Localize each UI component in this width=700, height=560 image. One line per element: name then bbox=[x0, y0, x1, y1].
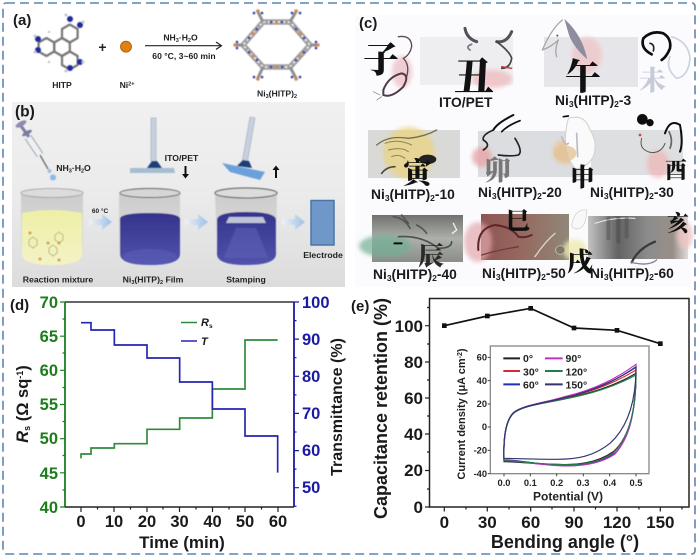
y axis tick labels: 80 bbox=[404, 353, 423, 372]
panel e: capacitance retention chart bbox=[351, 298, 689, 552]
reaction condition: reagent: O bbox=[191, 32, 198, 42]
Ni label: 2+ bbox=[128, 82, 134, 88]
reaction condition: reagent: 2 bbox=[188, 38, 191, 44]
zodiac calligraphy characters: 辰 bbox=[418, 236, 444, 273]
panel d: sheet resistance and transmittance chart bbox=[10, 294, 346, 552]
beaker: stamping bbox=[215, 188, 277, 265]
framework label: (HITP) bbox=[269, 88, 294, 98]
zodiac calligraphy characters: 酉 bbox=[665, 154, 687, 185]
sample labels: (HITP) bbox=[609, 266, 649, 281]
inset y tick labels bbox=[474, 352, 487, 479]
sample labels: 2 bbox=[614, 99, 619, 109]
inset x tick labels: 0.4 bbox=[603, 478, 617, 488]
sample labels: (HITP) bbox=[609, 185, 649, 200]
panel c background bbox=[355, 15, 691, 287]
framework label: 2 bbox=[294, 94, 297, 100]
sample labels: 2 bbox=[430, 193, 435, 203]
flow arrows bbox=[89, 214, 305, 230]
data line: Rs bbox=[81, 340, 278, 458]
inset y tick labels: -20 bbox=[474, 446, 487, 456]
zodiac calligraphy characters: 巳 bbox=[506, 201, 530, 236]
inset x tick labels: 0.2 bbox=[550, 478, 563, 488]
step label: film: Ni bbox=[123, 274, 131, 284]
sample labels: 2 bbox=[541, 272, 546, 282]
inset frame and curves bbox=[488, 346, 649, 476]
sample labels: -20 bbox=[542, 185, 562, 200]
beaker: Ni3(HITP)2 film bbox=[119, 188, 180, 265]
arrow: down bbox=[182, 166, 189, 178]
y axis tick labels: 100 bbox=[395, 317, 423, 336]
inset legend labels: 90° bbox=[566, 353, 581, 365]
sample labels: 3 bbox=[569, 99, 574, 109]
zodiac calligraphy characters: 卯 bbox=[484, 149, 511, 188]
zodiac art: bottom row bbox=[393, 210, 657, 264]
sample labels: -30 bbox=[654, 185, 674, 200]
panel b: fabrication process bbox=[12, 102, 345, 287]
icon: electrode bbox=[311, 200, 334, 245]
inset y axis title: -2 bbox=[457, 352, 464, 358]
sample labels: 3 bbox=[604, 191, 609, 201]
left axis title: ) bbox=[14, 365, 32, 371]
electrode label: Electrode bbox=[303, 250, 343, 260]
legend: s bbox=[209, 323, 213, 330]
reaction condition: reagent: NH bbox=[163, 32, 176, 42]
zodiac calligraphy characters: 未 bbox=[639, 59, 666, 98]
panel label (d): (d) bbox=[10, 297, 29, 314]
HITP label: HITP bbox=[52, 80, 72, 90]
sample labels: 3 bbox=[492, 191, 497, 201]
data line: T bbox=[81, 323, 278, 473]
sample labels: -10 bbox=[435, 187, 455, 202]
NH3H2O label: NH bbox=[56, 163, 69, 173]
x axis tick labels: 120 bbox=[603, 513, 631, 532]
sample labels: Ni bbox=[590, 266, 604, 281]
icon: Ni ion bbox=[120, 41, 132, 52]
legend: T bbox=[201, 336, 209, 348]
x axis tick labels: 30 bbox=[170, 513, 189, 531]
panel c: transparent film samples with zodiac artwork bbox=[355, 15, 693, 287]
x axis tick labels: 60 bbox=[521, 513, 540, 532]
sample labels: Ni bbox=[482, 266, 496, 281]
sample labels: -3 bbox=[619, 93, 632, 108]
NH3H2O label: 2 bbox=[81, 168, 84, 174]
x axis tick labels: 40 bbox=[203, 513, 222, 531]
zodiac calligraphy characters: 午 bbox=[565, 49, 601, 100]
y axis tick labels: 60 bbox=[404, 389, 423, 408]
inset y tick labels: -40 bbox=[474, 469, 487, 479]
sample labels: (HITP) bbox=[497, 185, 537, 200]
inset y tick labels: 20 bbox=[477, 399, 487, 409]
inset y tick labels: 40 bbox=[477, 376, 487, 386]
x axis tick labels: 30 bbox=[478, 513, 497, 532]
sample labels: 2 bbox=[537, 191, 542, 201]
x axis tick labels: 0 bbox=[440, 513, 449, 532]
icon: HITP molecule bbox=[34, 14, 84, 72]
inset legend labels: 150° bbox=[566, 380, 587, 392]
sample labels: (HITP) bbox=[392, 267, 432, 282]
sample labels: 3 bbox=[387, 273, 392, 283]
left axis tick labels: 65 bbox=[40, 328, 58, 346]
right axis tick labels: 100 bbox=[302, 294, 330, 312]
sample labels: 3 bbox=[496, 272, 501, 282]
framework label: Ni bbox=[257, 88, 266, 98]
x axis tick labels: 20 bbox=[138, 513, 156, 531]
y axis tick labels: 40 bbox=[404, 425, 423, 444]
step label: reaction mixture: Reaction mixture bbox=[23, 274, 93, 284]
inset legend labels: 30° bbox=[523, 366, 539, 378]
Ni label: Ni bbox=[120, 80, 128, 90]
sample labels bbox=[371, 93, 674, 283]
right axis tick labels: 60 bbox=[302, 442, 320, 460]
sample labels: Ni bbox=[371, 187, 385, 202]
plot frame bbox=[430, 298, 689, 507]
x axis title: Bending angle (°) bbox=[491, 532, 639, 552]
arrow: reaction bbox=[145, 42, 222, 49]
icon: syringe bbox=[15, 119, 56, 180]
inset y tick labels: 60 bbox=[477, 352, 487, 362]
zodiac calligraphy characters: 戌 bbox=[567, 242, 593, 279]
zodiac calligraphy characters bbox=[363, 32, 690, 279]
sample labels: ITO/PET bbox=[439, 95, 493, 110]
inset x tick labels: 0.1 bbox=[524, 478, 537, 488]
left axis tick labels: 45 bbox=[40, 465, 58, 483]
y axis tick labels bbox=[395, 317, 423, 517]
beaker: reaction mixture bbox=[21, 188, 83, 265]
sample labels: Ni bbox=[555, 93, 569, 108]
zodiac calligraphy characters: 亥 bbox=[667, 207, 690, 238]
plus sign: + bbox=[98, 39, 107, 55]
film samples bbox=[368, 37, 688, 262]
right axis tick labels bbox=[302, 294, 330, 497]
inset y axis title: Current density (μA cm bbox=[456, 358, 468, 480]
right axis tick labels: 50 bbox=[302, 479, 320, 497]
zodiac calligraphy characters: 申 bbox=[570, 158, 595, 194]
plot frame and axes bbox=[60, 302, 299, 512]
step label: film: 3 bbox=[131, 280, 134, 286]
left axis tick labels: 60 bbox=[40, 362, 58, 380]
panel b background bbox=[12, 102, 345, 287]
x axis title: Time (min) bbox=[139, 533, 225, 552]
x axis tick labels bbox=[76, 513, 287, 531]
zodiac calligraphy characters: 丑 bbox=[454, 46, 494, 103]
inset x tick labels: 0.5 bbox=[630, 478, 642, 488]
sample labels: -60 bbox=[654, 266, 674, 281]
inset legend labels: 0° bbox=[523, 353, 533, 365]
left axis tick labels: 55 bbox=[40, 396, 58, 414]
inset x axis title: Potential (V) bbox=[533, 490, 603, 504]
zodiac calligraphy characters: 寅 bbox=[403, 151, 436, 192]
y axis title: Capacitance retention (%) bbox=[371, 298, 391, 519]
left axis tick labels: 50 bbox=[40, 430, 58, 448]
panel label (b): (b) bbox=[15, 104, 35, 120]
x axis tick labels: 50 bbox=[236, 513, 254, 531]
icon: Ni3(HITP)2 framework bbox=[233, 9, 320, 81]
step label: film: (HITP) bbox=[134, 274, 160, 284]
right axis tick labels: 70 bbox=[302, 405, 320, 423]
NH3H2O label: O bbox=[84, 163, 91, 173]
left axis tick labels: 40 bbox=[40, 499, 58, 517]
sample labels: -40 bbox=[437, 267, 457, 282]
panel label (a): (a) bbox=[13, 12, 31, 29]
zodiac art: middle row bbox=[377, 114, 682, 173]
inset x tick labels: 0.0 bbox=[498, 478, 510, 488]
data line: retention bbox=[442, 306, 663, 346]
inset chart: cyclic voltammetry bbox=[456, 346, 649, 504]
inset legend labels: 60° bbox=[523, 380, 539, 392]
icon: film holder down bbox=[130, 118, 175, 173]
inset y tick labels: 0 bbox=[482, 422, 487, 432]
sample labels: Ni bbox=[373, 267, 387, 282]
sample labels: 3 bbox=[604, 272, 609, 282]
x axis tick labels: 150 bbox=[646, 513, 674, 532]
step label: film: 2 bbox=[160, 280, 163, 286]
icon: film holder up bbox=[222, 117, 265, 180]
ITO/PET label: ITO/PET bbox=[165, 153, 199, 163]
left axis title: -1 bbox=[15, 371, 25, 379]
framework label: 3 bbox=[266, 94, 269, 100]
reaction condition: reagent: ·H bbox=[179, 32, 188, 42]
y axis tick labels: 20 bbox=[404, 461, 423, 480]
axis ticks bbox=[425, 308, 682, 512]
watercolour accents bbox=[359, 37, 693, 262]
NH3H2O label: 3 bbox=[69, 168, 72, 174]
x axis tick labels: 60 bbox=[269, 513, 287, 531]
panel label (e): (e) bbox=[351, 298, 369, 315]
panel label (c): (c) bbox=[359, 15, 377, 32]
x axis tick labels: 10 bbox=[105, 513, 123, 531]
legend: R bbox=[201, 317, 209, 329]
NH3H2O label: ·H bbox=[72, 163, 81, 173]
reaction condition: reagent: 3 bbox=[176, 38, 179, 44]
left axis title: (Ω sq bbox=[14, 379, 32, 426]
zodiac art: top row bbox=[373, 20, 690, 100]
x axis tick labels bbox=[440, 513, 674, 532]
arrow: up bbox=[272, 166, 280, 178]
sample labels: (HITP) bbox=[390, 187, 430, 202]
sample labels: Ni bbox=[590, 185, 604, 200]
sample labels: (HITP) bbox=[574, 93, 614, 108]
left axis title: R bbox=[14, 431, 32, 443]
sample labels: -50 bbox=[546, 266, 566, 281]
left axis title: s bbox=[22, 426, 32, 431]
sample labels: 2 bbox=[649, 191, 654, 201]
inset legend labels bbox=[523, 353, 587, 392]
step label: stamping: Stamping bbox=[226, 274, 266, 284]
inset y axis title: ) bbox=[456, 348, 468, 352]
x axis tick labels: 0 bbox=[76, 513, 86, 531]
legend bbox=[181, 317, 213, 348]
y axis tick labels: 0 bbox=[414, 498, 423, 517]
sample labels: 2 bbox=[649, 272, 654, 282]
right axis tick labels: 80 bbox=[302, 368, 320, 386]
panel a: synthesis scheme bbox=[13, 9, 320, 100]
left axis tick labels: 70 bbox=[40, 294, 58, 312]
zodiac calligraphy characters: 子 bbox=[363, 32, 399, 83]
step label: film: Film bbox=[163, 274, 184, 284]
inset x tick labels bbox=[498, 478, 642, 488]
inset x tick labels: 0.3 bbox=[577, 478, 589, 488]
60 C label: 60 °C bbox=[92, 207, 108, 215]
sample labels: 2 bbox=[432, 273, 437, 283]
sample labels: 3 bbox=[385, 193, 390, 203]
x axis tick labels: 90 bbox=[565, 513, 583, 532]
left axis tick labels bbox=[40, 294, 58, 517]
sample labels: Ni bbox=[478, 185, 492, 200]
inset legend labels: 120° bbox=[566, 366, 587, 378]
sample labels: (HITP) bbox=[501, 266, 541, 281]
right axis tick labels: 90 bbox=[302, 331, 320, 349]
reaction condition: temperature: 60 °C, 3~60 min bbox=[152, 51, 216, 61]
right axis title: Transmittance (%) bbox=[329, 338, 346, 476]
